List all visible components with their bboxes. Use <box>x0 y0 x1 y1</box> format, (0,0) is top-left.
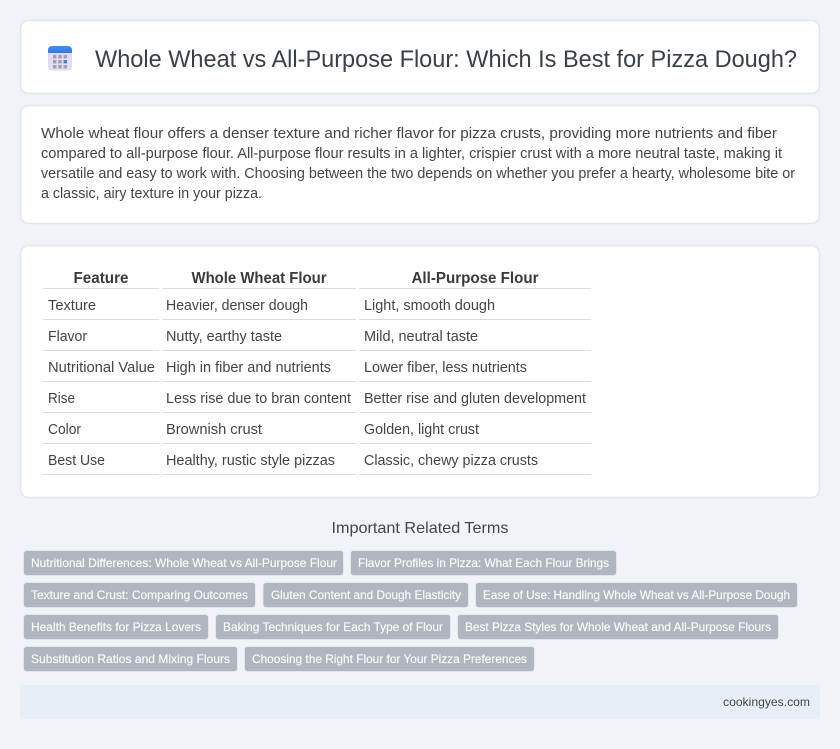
tag <box>24 646 238 672</box>
row: flavor <box>48 329 478 345</box>
row: nutritional value: High in fiber and nutrients <box>166 360 331 376</box>
row: rise: Rise <box>48 391 75 407</box>
tag <box>24 550 344 576</box>
tag: Nutritional Differences: Whole Wheat vs All-Purpose Flour <box>31 556 337 570</box>
row: texture: Texture <box>48 298 96 314</box>
row: texture <box>48 298 495 314</box>
intro text: versatile and easy to work with. Choosing between the two depends on whether you prefer a hearty, wholesome bite or <box>41 166 795 182</box>
row: texture: Light, smooth dough <box>364 298 495 314</box>
tag: Ease of Use: Handling Whole Wheat vs All-Purpose Dough <box>483 588 790 602</box>
table header <box>74 270 538 287</box>
tag: Choosing the Right Flour for Your Pizza Preferences <box>252 652 527 666</box>
intro text: Whole wheat flour offers a denser texture and richer flavor for pizza crusts, providing more nutrients and fiber <box>41 126 777 142</box>
intro text: a classic, airy texture in your pizza. <box>41 186 262 202</box>
row: rise <box>48 391 586 407</box>
tag: Substitution Ratios and Mixing Flours <box>31 652 230 666</box>
intro text: compared to all-purpose flour. All-purpose flour results in a lighter, crispier crust with a more neutral taste, making it <box>41 146 782 162</box>
row: nutritional value: Lower fiber, less nutrients <box>364 360 527 376</box>
row: best use: Healthy, rustic style pizzas <box>166 453 335 469</box>
row: color: Golden, light crust <box>364 422 479 438</box>
tag: Flavor Profiles in Pizza: What Each Flour Brings <box>358 556 609 570</box>
footer bar <box>20 685 820 719</box>
tag <box>476 582 798 608</box>
row: best use <box>48 453 538 469</box>
heading: important related terms: Important Related Terms <box>332 520 508 537</box>
row: rise: Less rise due to bran content <box>166 391 351 407</box>
table header: Feature <box>74 270 129 287</box>
title: Whole Wheat vs All-Purpose Flour: Which Is Best for Pizza Dough? <box>95 46 797 73</box>
row: best use: Best Use <box>48 453 105 469</box>
row: flavor: Flavor <box>48 329 87 345</box>
tag <box>350 550 616 576</box>
row: color <box>48 422 479 438</box>
row: texture: Heavier, denser dough <box>166 298 308 314</box>
related term tags <box>24 550 798 672</box>
panel: header <box>20 20 820 94</box>
table header: Whole Wheat Flour <box>192 270 326 287</box>
footer source: cookingyes.com <box>723 695 810 709</box>
row: nutritional value: Nutritional Value <box>48 360 155 376</box>
tag: Gluten Content and Dough Elasticity <box>271 588 461 602</box>
row: best use: Classic, chewy pizza crusts <box>364 453 538 469</box>
panel: introduction <box>20 106 820 224</box>
tag <box>263 582 468 608</box>
intro text <box>41 126 795 202</box>
row: color: Brownish crust <box>166 422 262 438</box>
tag <box>24 582 256 608</box>
tag: Health Benefits for Pizza Lovers <box>31 620 201 634</box>
tag <box>458 614 778 640</box>
row: rise: Better rise and gluten development <box>364 391 586 407</box>
row: nutritional value <box>48 360 527 376</box>
icon: calendar <box>48 46 72 70</box>
tag <box>24 614 208 640</box>
row: flavor: Nutty, earthy taste <box>166 329 282 345</box>
tag: Best Pizza Styles for Whole Wheat and All-Purpose Flours <box>465 620 771 634</box>
tag <box>244 646 534 672</box>
table header: All-Purpose Flour <box>412 270 538 287</box>
tag <box>216 614 450 640</box>
row: flavor: Mild, neutral taste <box>364 329 478 345</box>
tag: Baking Techniques for Each Type of Flour <box>223 620 443 634</box>
tag: Texture and Crust: Comparing Outcomes <box>31 588 248 602</box>
panel: comparison table <box>20 246 820 498</box>
row: color: Color <box>48 422 81 438</box>
